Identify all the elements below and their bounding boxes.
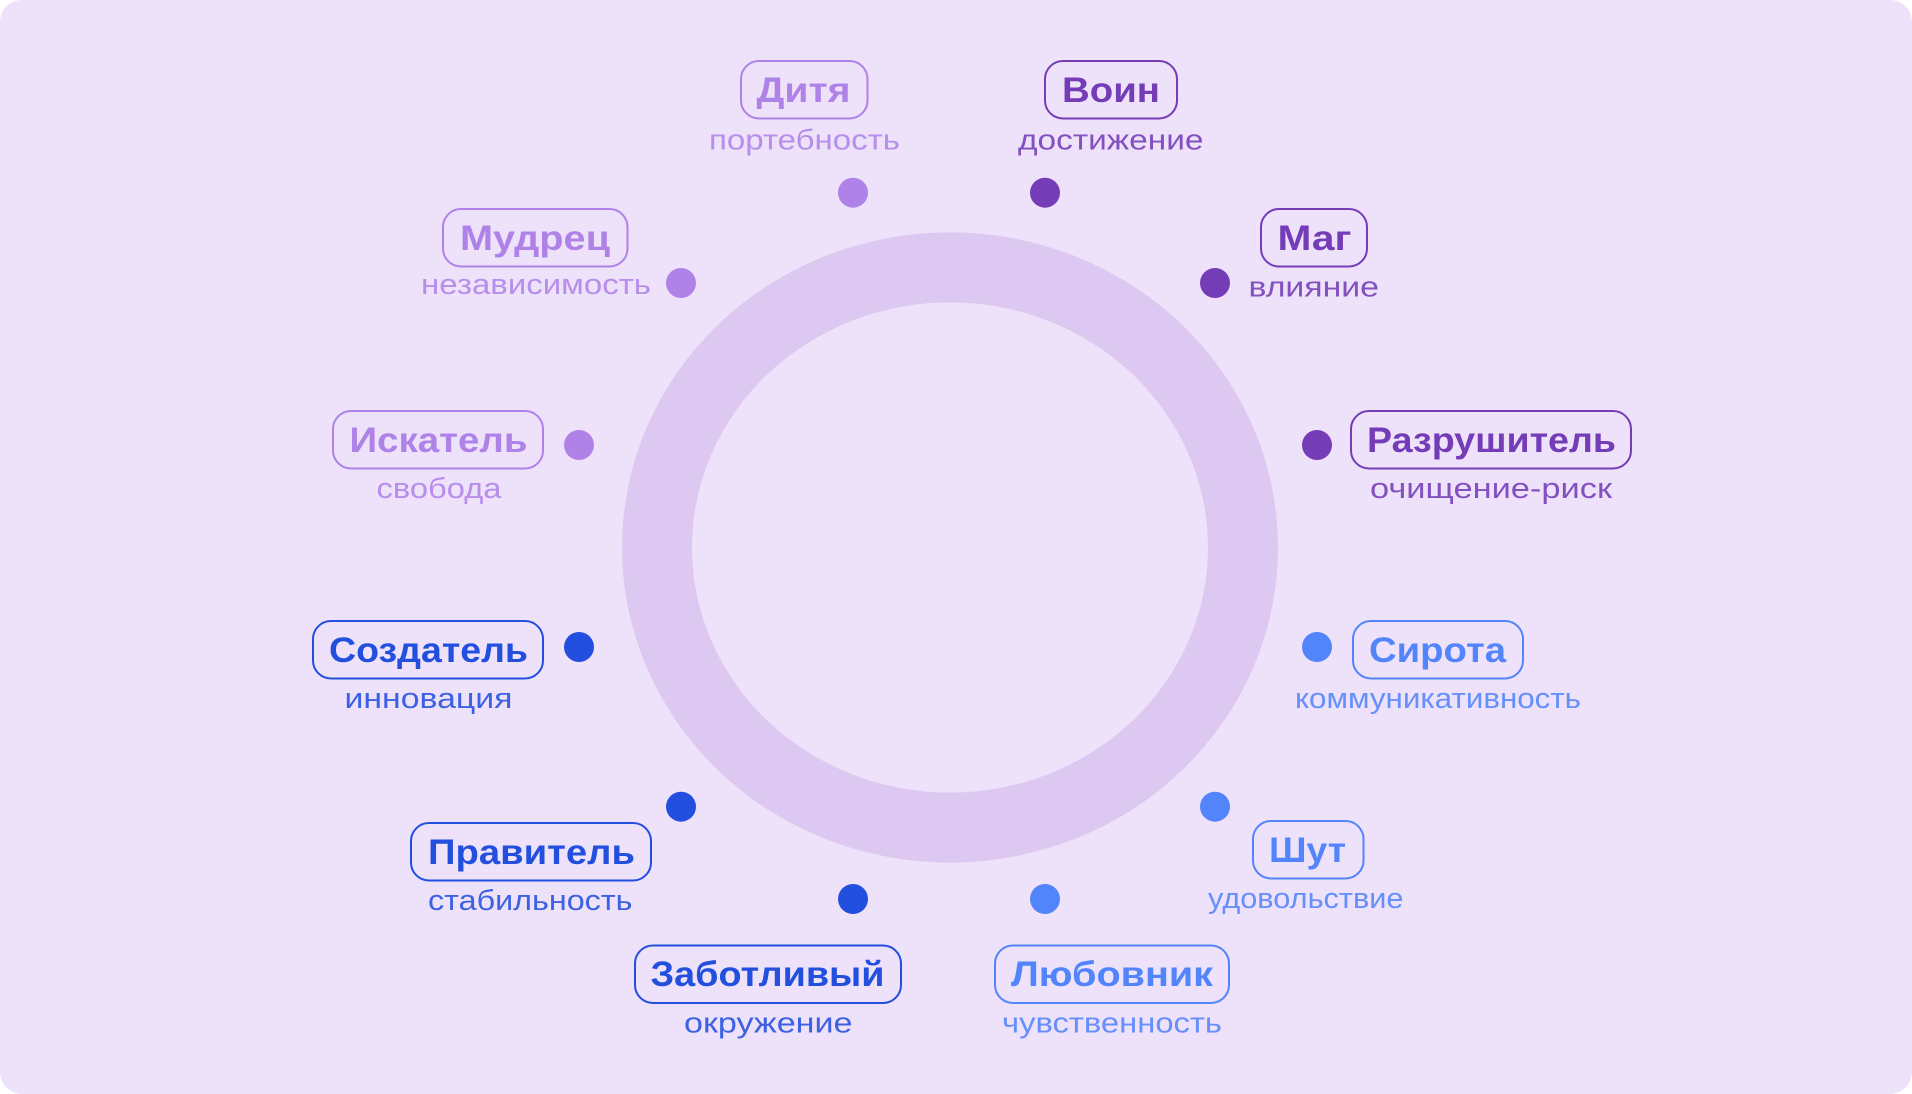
- archetype: Шут: удовольствие: [1208, 883, 1404, 915]
- archetype: Заботливый: окружение: [684, 1008, 852, 1040]
- archetype: Искатель: Искатель: [350, 421, 528, 460]
- archetype: Заботливый: [635, 884, 901, 1040]
- archetype: Любовник: Любовник: [1011, 955, 1214, 994]
- archetype: Любовник: [995, 884, 1229, 1040]
- archetype: Правитель: Правитель: [428, 833, 635, 872]
- archetype: Создатель: [313, 621, 594, 715]
- archetype: Маг: влияние: [1248, 272, 1379, 304]
- archetype: Шут: [1200, 792, 1404, 915]
- archetype: Создатель: Создатель: [329, 631, 528, 670]
- archetype: Маг: Маг: [1278, 219, 1352, 258]
- archetype: Воин: Воин: [1062, 71, 1160, 110]
- archetype: Мудрец: Мудрец: [460, 219, 611, 258]
- archetype: Искатель: [333, 411, 594, 505]
- archetype: Заботливый: Заботливый: [650, 955, 884, 994]
- archetype: Дитя: портебность: [709, 124, 900, 156]
- archetype: Любовник: чувственность: [1002, 1008, 1222, 1040]
- archetype: Дитя: Дитя: [756, 71, 850, 110]
- archetype: Разрушитель: очищение-риск: [1370, 473, 1612, 505]
- archetype: Сирота: Сирота: [1369, 631, 1507, 670]
- archetype: Сирота: [1295, 621, 1581, 715]
- archetype: Искатель: свобода: [376, 473, 502, 505]
- archetype: Создатель: инновация: [344, 683, 512, 715]
- archetype: Дитя: [709, 61, 900, 208]
- archetype: Сирота: коммуникативность: [1295, 683, 1581, 715]
- archetype: Воин: достижение: [1018, 124, 1204, 156]
- archetype: Мудрец: независимость: [421, 269, 651, 301]
- archetype: Мудрец: [421, 209, 696, 301]
- ring: [622, 232, 1278, 863]
- archetype: Разрушитель: [1302, 411, 1631, 505]
- archetype: Разрушитель: Разрушитель: [1367, 421, 1616, 460]
- archetype: Маг: [1200, 209, 1379, 304]
- archetype: Правитель: [411, 792, 696, 917]
- archetype: Шут: Шут: [1269, 831, 1346, 870]
- archetype: Воин: [1018, 61, 1204, 208]
- archetype: Правитель: стабильность: [428, 885, 632, 917]
